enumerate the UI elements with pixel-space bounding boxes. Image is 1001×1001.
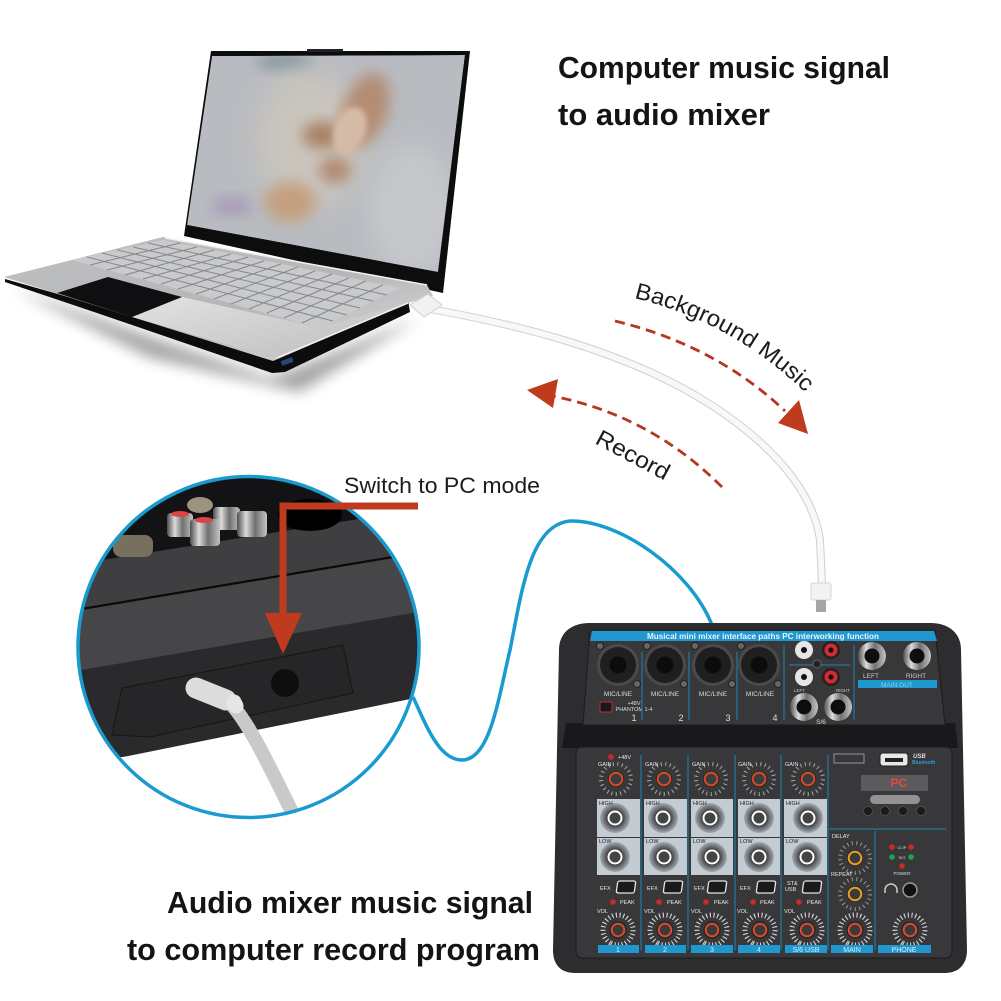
laptop [4, 49, 470, 392]
heading: mixer to computer [127, 885, 540, 967]
red pointer arrow [265, 502, 418, 654]
channel small labels: LOW [693, 839, 706, 845]
S/6 jacks [790, 688, 852, 726]
channel small labels [597, 755, 822, 915]
heading: computer to mixer: Computer music signal [558, 50, 890, 85]
chrome RCA and jack connectors [113, 497, 342, 557]
mixer back panel [104, 478, 358, 560]
cable in inset [232, 705, 295, 818]
magnified inset: switch on mixer [70, 470, 430, 830]
channel small labels: EFX [694, 886, 705, 892]
channel small labels: +48V [618, 755, 631, 761]
main out jacks: LEFT [863, 673, 879, 680]
channel dividers [641, 755, 946, 950]
label: Switch to PC mode: Switch to PC mode [344, 473, 540, 498]
RCA inputs [795, 641, 840, 686]
delay and repeat knobs: DELAY [832, 834, 850, 840]
input labels: MIC/LINE [604, 691, 633, 698]
channel small labels: VOL [784, 909, 795, 915]
input labels: 4 [772, 713, 778, 723]
channel small labels: PEAK [714, 900, 729, 906]
upper side band [84, 519, 390, 608]
mixer body [553, 623, 967, 973]
channel small labels: HIGH [646, 801, 660, 807]
LEDs [608, 754, 802, 905]
channel small labels: GAIN [692, 762, 705, 768]
LED display [861, 775, 928, 791]
S/6 jacks: LEFT [794, 688, 805, 693]
banner: Musical mini mixer interface paths PC interworking function [647, 632, 879, 641]
channel small labels: HIGH [599, 801, 613, 807]
EQ panels [597, 799, 827, 875]
bottom channel labels: S/6 USB [793, 947, 820, 954]
heading: mixer to computer: Audio mixer music signal [167, 885, 533, 920]
heading: mixer to computer: to computer record program [127, 932, 540, 967]
mode label and media buttons [864, 795, 926, 816]
EFX buttons [616, 881, 822, 893]
input labels: 1 [631, 713, 637, 723]
bottom channel labels: 2 [663, 947, 667, 954]
channel small labels: HIGH [693, 801, 707, 807]
LED display: PC [891, 776, 908, 790]
channel small labels: LOW [740, 839, 753, 845]
gain knobs [596, 759, 828, 799]
label: Record: Record [592, 424, 674, 485]
recessed switch panel [112, 645, 353, 737]
main out label [858, 680, 937, 689]
silver highlight edges [165, 238, 427, 358]
channel small labels: HIGH [786, 801, 800, 807]
laptop base bottom edge [5, 279, 410, 373]
channel small labels: VOL [597, 909, 608, 915]
status LEDs [889, 844, 914, 876]
USB plug [410, 294, 442, 317]
S/6 jacks: S/6 [816, 719, 826, 726]
channel small labels: PEAK [760, 900, 775, 906]
arrow: record [527, 379, 722, 487]
input labels: MIC/LINE [699, 691, 728, 698]
input labels: MIC/LINE [651, 691, 680, 698]
white USB cable [410, 294, 831, 612]
bottom channel labels: 4 [757, 947, 761, 954]
audio mixer [553, 623, 967, 973]
phantom switch [600, 702, 612, 712]
USB and bluetooth section: Bluetooth [912, 760, 935, 766]
channel small labels: GAIN [785, 762, 798, 768]
inset ring [78, 476, 419, 818]
palm rest [132, 297, 408, 358]
lower side band [80, 558, 414, 670]
channel small labels: PEAK [667, 900, 682, 906]
combo inputs [596, 642, 782, 688]
input labels: +48V [628, 701, 641, 707]
status LEDs: SIG [899, 855, 905, 860]
banner [590, 631, 937, 641]
status LEDs: CLIP [898, 845, 907, 850]
bottom channel labels: 3 [710, 947, 714, 954]
channel small labels: EFX [600, 886, 611, 892]
channel small labels: EFX [647, 886, 658, 892]
delay and repeat knobs: REPEAT [831, 872, 853, 878]
control panel [576, 747, 952, 958]
bottom channel labels: 1 [616, 947, 620, 954]
bottom channel labels [598, 945, 931, 954]
channel small labels: GAIN [598, 762, 611, 768]
micro USB connector [811, 583, 831, 600]
heading: computer to mixer [558, 50, 890, 132]
input labels: MIC/LINE [746, 691, 775, 698]
channel small labels: VOL [691, 909, 702, 915]
main out jacks: RIGHT [906, 673, 926, 680]
groove [84, 556, 392, 610]
headphone output [885, 883, 917, 897]
laptop display blurred wallpaper [187, 54, 465, 275]
arrow: background music [615, 321, 808, 434]
channel small labels: EFX [740, 886, 751, 892]
channel small labels: GAIN [645, 762, 658, 768]
inset USB plug [196, 688, 236, 706]
EQ knobs [600, 803, 823, 872]
USB port [281, 357, 294, 366]
USB and bluetooth section [834, 753, 935, 766]
channel small labels: ST& [787, 881, 798, 887]
S/6 jacks: RIGHT [836, 688, 850, 693]
label: Background Music: Background Music [636, 283, 812, 390]
laptop shadow [12, 288, 420, 392]
channel small labels: GAIN [738, 762, 751, 768]
channel small labels: LOW [786, 839, 799, 845]
bottom channel labels: MAIN [843, 947, 861, 954]
status LEDs: POWER [893, 871, 911, 876]
top input panel [583, 630, 945, 726]
keyboard [72, 240, 400, 328]
channel small labels: VOL [737, 909, 748, 915]
channel small labels: PEAK [620, 900, 635, 906]
channel small labels: VOL [644, 909, 655, 915]
input labels: PHANTOM 1-4 [616, 707, 652, 713]
input labels: 3 [725, 713, 731, 723]
blue connector line [413, 521, 712, 760]
dividers [642, 645, 854, 720]
input labels: 2 [678, 713, 684, 723]
channel small labels: PEAK [807, 900, 822, 906]
volume knobs [598, 910, 930, 950]
main out label: MAIN OUT [881, 682, 913, 689]
laptop screen lid [184, 51, 470, 293]
mode switch button [271, 669, 299, 697]
bottom channel labels: PHONE [892, 947, 917, 954]
heading: computer to mixer: to audio mixer [558, 97, 770, 132]
input labels [604, 691, 778, 723]
laptop base deck [4, 237, 433, 361]
channel small labels: HIGH [740, 801, 754, 807]
channel small labels: LOW [646, 839, 659, 845]
USB and bluetooth section: USB [913, 754, 926, 760]
channel small labels: LOW [599, 839, 612, 845]
channel small labels: USB [785, 887, 797, 893]
dark mixer silhouette [81, 519, 418, 757]
main out jacks [858, 642, 931, 680]
trackpad [57, 277, 182, 317]
delay and repeat knobs [831, 834, 875, 914]
